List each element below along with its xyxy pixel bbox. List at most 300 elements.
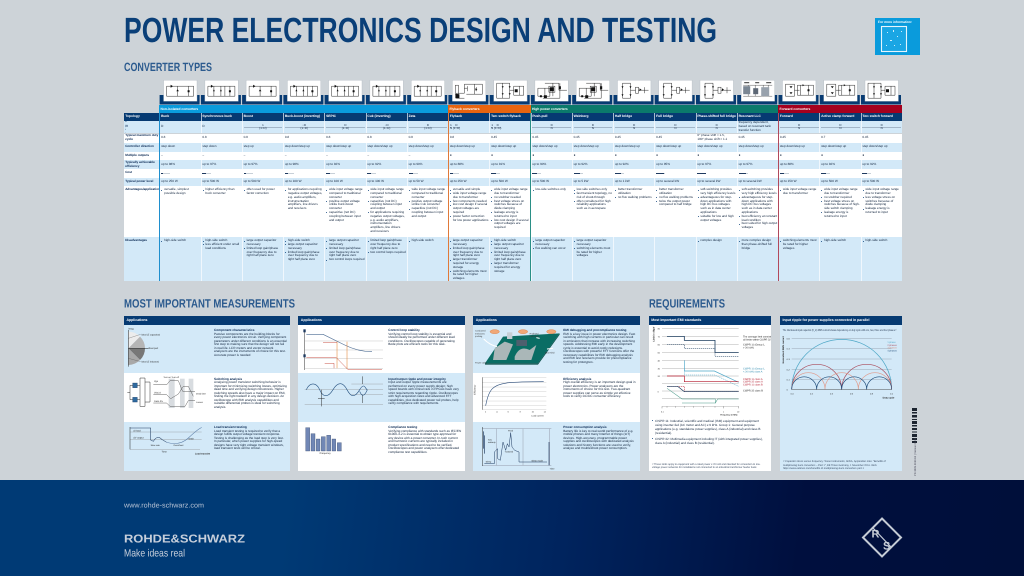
text: ripple and power integrity: Input/output ripple and power integrity	[388, 377, 446, 381]
table row: advantages and applications: versatile, simplest possible design	[164, 187, 189, 195]
text: load transient testing: Load transient testing is required to verify that a design fulfills output voltage transient response. Testing is challenging as the load step is very fast. In particular, when power supplies for high-speed designs have very tight voltage transient windows, load transient tests will be critical.	[214, 429, 284, 450]
chart: EMI limit lines: 50	[657, 352, 660, 354]
table row: advantages and applications: wide input voltage range due to transformer	[824, 187, 858, 195]
table row: drawbacks: high-side switch	[865, 238, 887, 242]
panel header	[124, 316, 290, 325]
table row: multiple outputs: –	[285, 153, 287, 157]
chart: RMS ripple current vs duty cycle: 1 phase	[887, 341, 896, 344]
table row: typical maximum duty cycle: Typical maximum duty cycle	[125, 134, 158, 141]
table row: advantages and applications: less voltage stress on switches because of diode clamping	[865, 195, 895, 206]
chart: EMI limit lines: < 20 kVA) class A	[743, 370, 762, 373]
table row: typical maximum duty cycle: 0.8	[367, 135, 372, 139]
table row: transfer function: N	[491, 126, 493, 130]
chart: EMI limit lines: 1	[723, 411, 724, 413]
table row: advantages and applications: soft-switching provides very high efficiency levels	[742, 187, 777, 195]
text: EMI debugging: EMI is a key issue in power electronics design. Fast switching with high currents in particular can result in emissions that increase with increasing switching speeds. Addressing EMI early in the development cycle is essential to avoid costly redesigns. Oscilloscopes with powerful FFT functions offer the necessary capabilities for EMI debugging analysis and EMI test receivers provide for precompliance testing for prototypes.	[563, 332, 635, 364]
table row: typical maximum duty cycle: 0.45	[862, 135, 868, 139]
section: ripple and power integrity	[298, 373, 465, 422]
table row: controller direction: step down/step up	[780, 144, 805, 148]
chart: EMI limit lines: 0.1	[661, 411, 664, 413]
text: load transient testing: Load transient testing	[214, 425, 247, 429]
table row: multiple outputs: Multiple outputs	[125, 153, 149, 157]
table header row: topology names: Full bridge	[656, 114, 673, 118]
table header row: topology names: Resonant LLC	[739, 114, 761, 118]
chart: EMI limit lines	[652, 326, 771, 416]
table row: controller direction: step down/step up	[739, 144, 764, 148]
chart: EMI limit lines: 80	[657, 328, 660, 330]
logo: R and S diamond: S	[883, 540, 890, 552]
text: control loop stability: Verifying control loop stability is essential and should ideally be performed under different load conditions. Oscilloscopes capable of generating Bode plots are efficient tools for this task.	[388, 332, 455, 346]
table row: transfer function: (1−D)	[424, 126, 432, 130]
table row: typical achievable efficiency: up to 91%	[491, 162, 505, 166]
table row: typical power level: up to 500 W	[491, 179, 508, 183]
table row: typical achievable efficiency: up to 97%	[244, 162, 258, 166]
table row: transfer function: N	[839, 126, 841, 130]
table row: advantages and applications: no snubber needed	[494, 195, 521, 199]
chart: efficiency curve: 10	[532, 411, 534, 414]
chart: RMS ripple current vs duty cycle: 4 phases	[887, 350, 897, 352]
category band: flyback converters: Flyback converters	[450, 106, 480, 110]
chart: EMI limit lines: 0	[657, 391, 659, 393]
converter circuit diagrams strip	[160, 80, 901, 104]
table row: drawbacks: large output capacitor necessary	[329, 238, 359, 246]
chart: efficiency curve	[474, 377, 546, 418]
table row: drawbacks: less efficient under small load conditions	[205, 242, 239, 250]
table row: typical maximum duty cycle: 0.45	[491, 135, 497, 139]
table row: advantages and applications: wide input voltage range compared to traditional converter	[412, 187, 445, 199]
table row: transfer function: N	[674, 126, 676, 130]
text: ripple and power integrity: Input and output ripple measurements are performed on every power supply design; high speed boards with critical rails in FPGAs have very strict requirements regarding ripple. Oscilloscopes with high acquisition rates and advanced FFT capabilities, plus dedicated power rail probes, help verify compliance with requirements.	[388, 380, 459, 405]
table row: typical power level: up to several kW	[697, 179, 720, 183]
table row: advantages and applications: wide input voltage range compared to traditional converter	[329, 187, 363, 199]
table row: drawbacks: limited loop gain/phase over frequency due to right half plane zero	[453, 246, 484, 257]
table row: transfer function: N	[592, 126, 594, 130]
table row: typical maximum duty cycle: 0.45	[739, 135, 745, 139]
table row: multiple outputs: –	[409, 153, 410, 157]
table row: transfer function: 1	[450, 123, 452, 127]
chart: EMI limit lines: 60	[657, 344, 660, 346]
chart: EMI limit lines: CISPR 11 class B	[743, 383, 762, 386]
chart: efficiency curve: Load current	[532, 415, 544, 418]
text: EMI debugging: EMI debugging and precompliance testing	[563, 328, 626, 332]
table header row: topology names: Active clamp forward	[821, 114, 854, 118]
panel header	[473, 316, 640, 325]
chart: load transient: Slew rate	[151, 444, 160, 446]
table row: transfer function: frequency dependent, based on resonant tank transfer function	[739, 121, 771, 132]
table row: typical power level: up to 150 W	[780, 179, 797, 183]
table row: advantages and applications: capacitive (not DC) coupling between input and output	[370, 199, 402, 210]
table row: drawbacks: limited loop gain/phase over frequency due to right half plane zero	[329, 246, 361, 257]
chart: harmonic bars	[306, 428, 342, 454]
chart: RMS ripple current vs duty cycle: 0.2	[787, 369, 790, 371]
table row: typical achievable efficiency: up to 92%	[326, 162, 340, 166]
table row: advantages and applications: capacitive (not DC) coupling between input and output	[329, 210, 361, 222]
table header row: topology names	[124, 113, 902, 121]
chart: Bode plot	[303, 329, 383, 370]
table row: advantages and applications	[124, 186, 902, 237]
table row: multiple outputs: –	[326, 153, 328, 157]
table row: typical achievable efficiency: up to 90%	[532, 162, 546, 166]
table row: typical power level: up to 100 W	[326, 179, 343, 183]
panel header	[780, 316, 902, 325]
table row: drawbacks: switching elements must be rated for higher voltages	[453, 269, 487, 280]
table row: drawbacks: limited loop gain/phase over frequency due to right half plane zero	[288, 250, 320, 261]
chart: efficiency curve: Efficiency	[474, 385, 477, 395]
table row: multiple outputs: ●	[615, 153, 617, 157]
chart: RMS ripple current vs duty cycle: 0.5	[787, 338, 790, 340]
table row: advantages and applications: versatile and simple	[453, 187, 480, 191]
table row: advantages and applications: twice the output power compared to half bridge	[659, 199, 692, 206]
table row: advantages and applications: advantageous for step-down applications with high DC bus voltages such as in data center applications	[700, 195, 732, 214]
table row: transfer function: D	[202, 124, 205, 128]
chart: EMI limit lines: 20	[657, 375, 660, 378]
table row: transfer function: D	[427, 123, 429, 127]
panel header: Applications	[126, 318, 148, 322]
table row: typical maximum duty cycle: 0.8	[202, 135, 207, 139]
text: component characteristics: Passive components are the building blocks for every power electronics circuit. Verifying component parameters under different conditions is an essential first step to making sure that the design will not fail in real life. LCR meters and vector network analyzers are the instruments of choice for this test. Accurate power is needed	[214, 332, 287, 357]
table row: typical achievable efficiency: up to 90%	[409, 162, 423, 166]
table header row: topology names: Buck-boost (inverting)	[285, 114, 320, 118]
chart: load transient: Overshoot	[173, 444, 183, 446]
table row: drawbacks: high-side switch	[164, 238, 186, 242]
illustration: circuit board with emissions: Radiated	[530, 333, 539, 335]
chart: efficiency curve: 8	[520, 411, 521, 414]
panel: most important EMI standards	[649, 316, 771, 471]
chart: RMS ripple current vs duty cycle: Normalized RMS current	[782, 336, 785, 363]
chart: impedance fan: Ideal (Z capacitor)	[141, 334, 160, 336]
table row: typical achievable efficiency	[124, 160, 902, 169]
table row: controller direction	[124, 143, 902, 152]
table row: transfer function: i	[125, 129, 126, 131]
panel header: Applications	[476, 318, 497, 322]
chart: RMS ripple current vs duty cycle: 0.4	[787, 348, 790, 350]
table row: advantages and applications: best suited for high output voltages	[742, 221, 777, 229]
illustration: circuit board with emissions: Conducted	[475, 330, 486, 332]
chart: RMS ripple current vs duty cycle: 0	[787, 389, 788, 391]
table row: transfer function: D	[592, 123, 594, 127]
table row: advantages and applications: leakage energy is returned to input	[865, 206, 890, 214]
table row: multiple outputs	[124, 152, 902, 160]
table row: typical power level: up to 50 W	[409, 179, 424, 183]
chart: power consumption trace: Sleep mode	[532, 459, 543, 462]
table row: controller direction: step down/step up	[821, 144, 846, 148]
section: component characteristics	[124, 325, 290, 373]
table row: drawbacks	[124, 237, 902, 281]
table row: advantages and applications: power factor correction for low power applications	[453, 214, 488, 222]
table row: transfer function: N	[716, 126, 718, 130]
table header row: topology names: Flyback	[450, 114, 462, 118]
table row: controller direction: step down/step up	[615, 144, 640, 148]
table row: controller direction: Controller direction	[125, 144, 154, 148]
table row: transfer function: (1−D)	[453, 126, 460, 130]
table row: drawbacks: two control loops required	[370, 250, 406, 254]
illustration: circuit board with emissions: Power cable	[475, 362, 487, 364]
table row: advantages and applications: advantageous for step-down applications with high DC bus voltages such as in data center applications	[742, 195, 773, 214]
table row: transfer function: N	[450, 126, 452, 130]
table row: typical power level: Typical power level	[125, 179, 153, 183]
navy tabs	[160, 95, 901, 104]
table row: transfer function: −D	[302, 123, 306, 127]
table header row: topology names: Cuk (inverting)	[367, 114, 391, 118]
chart: impedance fan	[128, 328, 160, 367]
table row: typical power level: up to 500 W	[202, 179, 219, 183]
footer band	[0, 480, 1024, 576]
text: efficiency analysis: Efficiency analysis	[563, 377, 591, 381]
table row: typical maximum duty cycle: 0.45	[532, 135, 538, 139]
table row: typical power level: up to 100 W	[367, 179, 384, 183]
logo: R and S diamond: R	[872, 528, 880, 540]
table row: typical achievable efficiency: up to 88%	[780, 162, 794, 166]
table row: typical maximum duty cycle	[124, 134, 902, 143]
chart: RMS ripple current vs duty cycle: 0.0	[791, 393, 794, 395]
table row: typical achievable efficiency: up to 92%	[367, 162, 381, 166]
panel header	[298, 316, 465, 325]
table row: drawbacks: Disadvantages	[125, 238, 147, 242]
table row: advantages and applications: no flux walking problems	[618, 195, 652, 199]
table row: transfer function: (1−D)	[301, 126, 308, 130]
panel: applications 3	[473, 316, 640, 471]
illustration: circuit board with emissions: emissions	[475, 333, 485, 335]
table row: advantages and applications: often used for power factor correction	[247, 187, 275, 195]
table row: drawbacks: larger transformer required for energy storage	[494, 261, 520, 273]
table row: typical power level: up to 250 W	[161, 179, 178, 183]
table row: drawbacks: high-side switch	[205, 238, 227, 242]
info box: for more information QR code: For more information:	[878, 20, 912, 24]
table row: drawbacks: two control loops required	[329, 257, 365, 261]
chart: RMS ripple current vs duty cycle: 0.1	[787, 379, 790, 381]
table row: multiple outputs: ●	[739, 153, 740, 157]
section: load transient testing	[124, 422, 290, 471]
table row: transfer function: (1−D)	[494, 126, 501, 130]
chart: EMI limit lines: all limits within CISPR 32	[743, 338, 770, 341]
chart: EMI limit lines: 10	[737, 411, 739, 413]
chart: impedance fan: Imag	[128, 328, 134, 330]
table row: transfer function: (1−D)	[383, 126, 390, 130]
chart: power consumption trace: Time	[550, 467, 555, 470]
footnote: ¹⁾ Capacitor stress versus frequency: Texas Instruments, SNVA, Application note: "Benefits of multiphasing buck converters – Part 1", EE Times Germany, 1 November 2016. Web: https://www.eetimes.com/benefits-of-multiphasing-buck-converters-part-1	[783, 460, 886, 470]
table row: cost: Cost	[125, 170, 132, 174]
chart: power consumption trace: wakeup	[488, 441, 496, 443]
table row: controller direction: step down/step up	[491, 144, 516, 148]
table header row: topology names: Two switch forward	[862, 114, 893, 118]
chart: EMI limit lines: 40	[657, 360, 660, 362]
table row: advantages and applications: few components needed	[453, 199, 487, 203]
illustration: circuit board with emissions	[475, 329, 560, 365]
chart: RMS ripple current vs duty cycle: 0.8	[870, 393, 873, 395]
text: compliance testing: Compliance testing	[388, 425, 417, 429]
table row: drawbacks: large output capacitor necessary	[535, 238, 565, 246]
text: compliance testing: Verifying compliance with standards such as IEC/EN 61000-3-2 is essential to obtain type approval for any device with a power converter. In-rush current and harmonic currents are typically included in product specifications and need to be verified. Oscilloscopes and power analyzers offer dedicated compliance test capabilities.	[388, 429, 461, 454]
chart: load transient	[130, 427, 210, 455]
table row: typical maximum duty cycle: 0.45	[780, 135, 786, 139]
category band: non-isolated converters	[159, 104, 448, 113]
text: power consumption analysis: Battery life is key to real-world performance of e.g. mobile phones and many Internet of things (IoT) devices. High-accuracy, programmable power supplies and oscilloscopes with dedicated analysis solutions and history functions are used to verify, analyze and troubleshoot power consumption.	[563, 429, 634, 450]
circuit schematics	[167, 82, 895, 98]
table row: transfer function: 1	[262, 123, 264, 127]
table row: advantages and applications: low-side switches only	[577, 187, 607, 191]
table row: typical achievable efficiency: up to 92%	[862, 162, 876, 166]
table row: typical maximum duty cycle: 180° phase shift ≈ 1.1	[697, 137, 727, 141]
website URL: www.rohde-schwarz.com	[124, 502, 204, 510]
table row: typical maximum duty cycle: 0.8	[244, 135, 248, 139]
table row: typical achievable efficiency: up to 92%	[615, 162, 629, 166]
table row: advantages and applications: leakage energy is returned to input	[824, 210, 848, 218]
table row: controller direction: step down/step up	[574, 144, 599, 148]
table row: drawbacks: more complex design than phase-shifted full bridge	[742, 238, 772, 250]
chart: harmonic bars: Frequency	[320, 452, 331, 454]
table row: drawbacks: large output capacitor necessary	[577, 238, 606, 246]
table row: drawbacks: complex design	[700, 238, 722, 242]
text: efficiency analysis: High overall efficiency is an important design goal in power electronics. Power analyzers are the instruments of choice for this test. Two-quadrant power supplies can serve as simple yet effective tools to verify DC/DC converter efficiency.	[563, 380, 636, 398]
chart: EMI limit lines: CISPR 11 class A	[743, 378, 762, 381]
table row: advantages and applications: better transformer utilization	[659, 187, 684, 195]
table row: typical achievable efficiency: up to 92%	[574, 162, 588, 166]
table header row: topology names: Two switch flyback	[491, 114, 521, 118]
table row: multiple outputs: ●	[450, 153, 452, 157]
table row: controller direction: step down/step up	[862, 144, 887, 148]
table row: drawbacks: high-side switch	[824, 238, 846, 242]
table row: multiple outputs: ●	[574, 153, 575, 157]
table row: transfer function: D	[881, 123, 883, 127]
chart: switching waveforms	[127, 376, 206, 408]
logo: R and S diamond	[862, 517, 902, 558]
text: control loop stability: Control loop stability	[388, 328, 420, 332]
table row: typical achievable efficiency: up to 95%	[656, 162, 670, 166]
table row: transfer function: D	[633, 123, 635, 127]
chart: RMS ripple current vs duty cycle	[782, 328, 897, 399]
table row: transfer function: D	[161, 124, 163, 128]
chart: switching waveforms: Vds,Id	[154, 392, 161, 395]
group separator line: forward	[778, 113, 779, 281]
info box: for more information QR code	[875, 18, 920, 55]
chart: EMI limit lines: Limit in dBµV	[652, 327, 655, 342]
section: efficiency analysis	[473, 373, 640, 422]
table row: transfer function: D	[344, 123, 346, 127]
chart: EMI limit lines: CISPR 11 (Group 1,	[743, 343, 765, 346]
table row: typical maximum duty cycle: 0.8	[161, 135, 165, 139]
table row: advantages and applications: best efficiency at constant load condition	[742, 214, 777, 222]
table row: multiple outputs: ●	[821, 153, 823, 157]
chart: impedance fan: Ideal (Z inductor)	[141, 360, 159, 363]
table row: advantages and applications: higher efficiency than buck converter	[205, 187, 235, 195]
chart: RMS ripple current vs duty cycle: 0.6	[850, 393, 853, 395]
table row: controller direction: step down/step up	[532, 144, 557, 148]
chart: switching waveforms: Gate drv	[154, 400, 163, 403]
table row: advantages and applications: soft-switching provides very high efficiency levels	[700, 187, 735, 195]
table row: typical maximum duty cycle: 0.45	[574, 135, 580, 139]
table row: controller direction: step down	[161, 144, 175, 148]
table row: transfer function: D	[497, 123, 499, 127]
table row: drawbacks: high-side switch	[494, 238, 516, 242]
category band: flyback converters	[448, 104, 530, 113]
text: component characteristics: Component characteristics	[214, 328, 254, 332]
category band: forward converters: Forward converters	[780, 106, 810, 110]
category band: high power converters	[530, 104, 778, 113]
table row: advantages and applications: wide input voltage range compared to traditional converter	[370, 187, 404, 199]
table row: advantages and applications: suitable for low and high output voltages	[700, 214, 734, 222]
table row: transfer function: D	[674, 123, 676, 127]
table row: multiple outputs: –	[202, 153, 204, 157]
table row: drawbacks: switching elements must be rated for higher voltages	[577, 246, 610, 257]
chart: RMS ripple current vs duty cycle: 0.4	[830, 393, 833, 395]
table row: transfer function: D	[839, 123, 841, 127]
table row: typical achievable efficiency: up to 97%	[202, 162, 216, 166]
chart: efficiency curve: 12	[544, 411, 546, 414]
text: EMI standards notes: CISPR 32: Multimedia equipment including IT (with integrated power supplies), class A (industrial) and class B (residential).	[655, 437, 763, 445]
chart: efficiency curve: 6	[508, 411, 509, 414]
table row: transfer function: N	[798, 126, 800, 130]
table row: drawbacks: high-side switch	[288, 238, 310, 242]
table row: controller direction: step down/step up	[326, 144, 351, 148]
table row: controller direction: step down	[202, 144, 216, 148]
table row: multiple outputs: ●	[780, 153, 782, 157]
table header row: topology names: Forward	[780, 114, 793, 118]
table row: multiple outputs: –	[161, 153, 163, 157]
table row: multiple outputs: –	[367, 153, 369, 157]
chart: EMI limit lines: 30	[657, 368, 660, 370]
table row: drawbacks: limited loop gain/phase over frequency due to right half plane zero	[370, 238, 402, 250]
category band: non-isolated converters: Non-isolated converters	[160, 106, 198, 110]
chart: RMS ripple current vs duty cycle: 3 phases	[887, 347, 897, 349]
panel header: Input ripple for power supplies connected in parallel	[782, 318, 869, 322]
chart: switching waveforms: Turn-on Turn-off	[163, 377, 179, 379]
table row: advantages and applications: no snubber required	[824, 195, 852, 199]
chart: switching waveforms: Dead time	[196, 393, 206, 396]
table row: advantages and applications: better transformer utilization	[618, 187, 642, 195]
table row: advantages and applications: positive output voltage unlike Cuk converter	[412, 199, 442, 206]
chart: switching waveforms: Losses	[196, 402, 203, 404]
table row: typical maximum duty cycle: 0.45	[615, 135, 621, 139]
table header row: topology names: SEPIC	[326, 114, 336, 118]
chart: power consumption trace: Sleep	[486, 461, 492, 463]
table row: advantages and applications: fast transient topology, no risk of shoot-through	[577, 191, 612, 199]
chart: RMS ripple current vs duty cycle: 1.0	[890, 393, 893, 395]
group separator line: non-isolated	[159, 113, 160, 281]
table row: transfer function: (1−D)	[342, 126, 349, 130]
illustration: circuit board with emissions: Near-field	[545, 352, 555, 354]
table row: typical power level: up to 5 kW	[574, 179, 588, 183]
table row: advantages and applications: low cost design if several output voltages are required	[453, 202, 487, 214]
group separator line: high power	[530, 113, 531, 281]
chart: efficiency curve: 2	[485, 411, 487, 414]
text: EMI standards notes: CISPR 11: Industrial, scientific and medical (ISM) equipment and equipment using inverter-fed (AC motor and AC) ≥ 9 kHz. Group 1: General purpose applications (e.g. standalone power supplies), class A (industrial) and class B (residential).	[655, 419, 760, 435]
chart: RMS ripple current vs duty cycle: 2 phases	[887, 344, 897, 347]
table row: typical maximum duty cycle: 0.8	[450, 135, 454, 139]
chart: RMS ripple current vs duty cycle: 0.2	[810, 393, 813, 395]
chart: switching waveforms: Vgs	[154, 381, 158, 383]
table row: typical power level: up to several kW	[739, 179, 762, 183]
chart: power consumption trace: Transmit	[505, 451, 513, 453]
table row: controller direction: step down/step up	[656, 144, 681, 148]
table row: drawbacks: limited loop gain/phase over frequency due to right half plane zero	[494, 250, 526, 261]
section: switching analysis	[124, 373, 290, 422]
table header row: topology names: Zeta	[409, 114, 415, 118]
chart: EMI limit lines: Frequency in MHz	[720, 414, 737, 416]
chart: EMI limit lines: > 20 kVA)	[743, 346, 754, 349]
table row: drawbacks: switching elements must be rated for higher voltages	[783, 238, 817, 250]
table row: drawbacks: high-side switch	[412, 238, 434, 242]
panel: applications 1	[124, 316, 290, 471]
category band: high power converters: High power converters	[532, 106, 568, 110]
section: EMI debugging	[473, 325, 640, 373]
table row: drawbacks: limited loop gain/phase over frequency due to right half plane zero	[247, 246, 278, 257]
table row: typical achievable efficiency: up to 92%	[821, 162, 835, 166]
table row: multiple outputs: ●	[862, 153, 864, 157]
panel header: Applications	[301, 318, 322, 322]
table header row: topology names: Synchronous buck	[202, 114, 232, 118]
table row: typical maximum duty cycle: 0.8	[326, 135, 330, 139]
table row: typical power level: up to 100 W	[285, 179, 302, 183]
